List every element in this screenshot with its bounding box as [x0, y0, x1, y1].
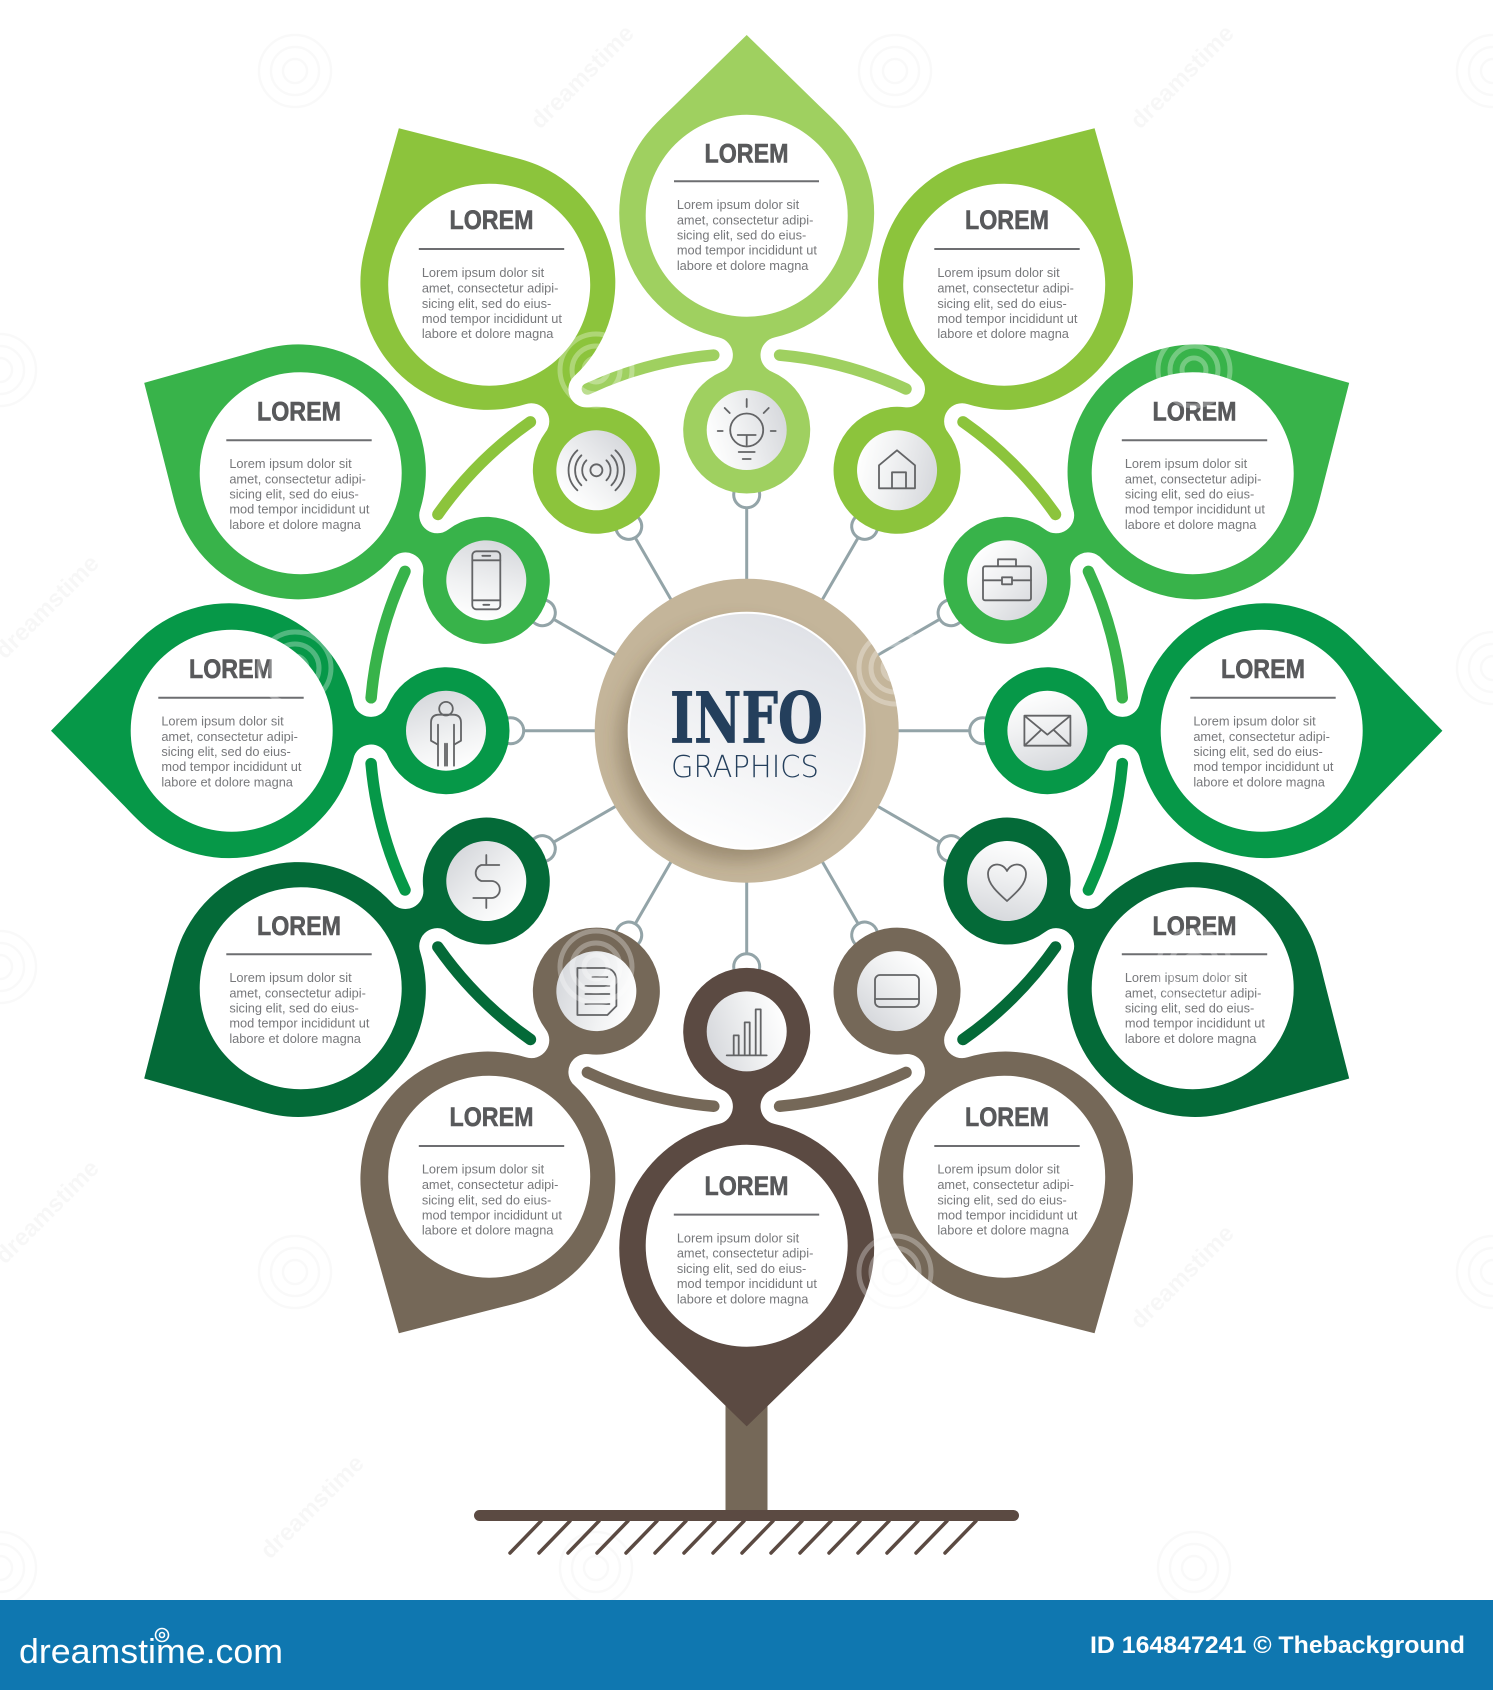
hub title INFO: INFO	[670, 677, 823, 760]
connector lines from hub to icons	[498, 482, 996, 980]
heading: LOREM	[1152, 397, 1236, 427]
body text: labore et dolore magna	[937, 326, 1070, 341]
body text: amet, consectetur adipi-	[1193, 729, 1330, 744]
body text: mod tempor incididunt ut	[422, 1207, 562, 1222]
body text: labore et dolore magna	[422, 1223, 554, 1238]
body text: amet, consectetur adipi-	[677, 212, 813, 227]
body text: labore et dolore magna	[229, 1031, 362, 1046]
body text: Lorem ipsum dolor sit	[677, 1230, 800, 1245]
footer banner	[0, 1600, 1493, 1690]
body text: Lorem ipsum dolor sit	[229, 970, 352, 985]
body text: amet, consectetur adipi-	[422, 1177, 558, 1192]
body text: mod tempor incididunt ut	[937, 311, 1078, 326]
body text: sicing elit, sed do eius-	[677, 228, 806, 243]
body text: amet, consectetur adipi-	[937, 280, 1074, 295]
heading: LOREM	[450, 1102, 534, 1132]
icon: person	[431, 702, 461, 766]
arc left of top leaf	[587, 355, 714, 389]
heading: LOREM	[704, 138, 788, 168]
body text: sicing elit, sed do eius-	[937, 1192, 1067, 1207]
body text: sicing elit, sed do eius-	[1125, 1001, 1254, 1016]
heading: LOREM	[189, 654, 273, 684]
leaf shape mid-lower right	[888, 739, 1413, 1189]
body text: amet, consectetur adipi-	[422, 280, 558, 295]
body text: sicing elit, sed do eius-	[1193, 744, 1323, 759]
text: dreamstime	[1125, 1220, 1240, 1334]
body text: sicing elit, sed do eius-	[422, 1192, 551, 1207]
leaf shape lower right	[755, 872, 1205, 1397]
body text: Lorem ipsum dolor sit	[937, 265, 1060, 280]
heading: LOREM	[450, 205, 534, 235]
body text: sicing elit, sed do eius-	[937, 296, 1067, 311]
body text: sicing elit, sed do eius-	[161, 744, 291, 759]
arc mid-upper right	[1059, 571, 1152, 698]
body text: amet, consectetur adipi-	[1125, 471, 1261, 486]
body text: amet, consectetur adipi-	[161, 729, 298, 744]
icon: bar chart	[727, 1009, 767, 1055]
leaf shape bottom	[619, 968, 874, 1426]
footer logo text: dreamstime.com	[19, 1633, 283, 1671]
arc mid-upper left	[342, 571, 434, 698]
icon: heart	[988, 865, 1026, 901]
body text: Lorem ipsum dolor sit	[422, 1162, 545, 1177]
body text: mod tempor incididunt ut	[1125, 1016, 1265, 1031]
icon: card	[875, 975, 919, 1007]
icon: dollar	[473, 855, 500, 908]
heading: LOREM	[257, 911, 341, 941]
body text: labore et dolore magna	[1193, 775, 1326, 790]
body text: sicing elit, sed do eius-	[229, 487, 359, 502]
leaf shape upper right	[755, 64, 1205, 589]
body text: labore et dolore magna	[1125, 1031, 1257, 1046]
body text: mod tempor incididunt ut	[229, 502, 370, 517]
ground hatching	[510, 1521, 976, 1553]
body text: labore et dolore magna	[1125, 517, 1257, 532]
ground line	[474, 1510, 1019, 1521]
leaf shape mid-upper left	[80, 272, 605, 722]
hub ring	[595, 579, 899, 883]
arc right	[1088, 764, 1122, 890]
panel: leaf upper right	[755, 64, 1205, 589]
body text: labore et dolore magna	[937, 1223, 1070, 1238]
body text: amet, consectetur adipi-	[229, 471, 366, 486]
body text: Lorem ipsum dolor sit	[229, 456, 352, 471]
hub subtitle GRAPHICS: GRAPHICS	[671, 750, 819, 785]
panel: leaf mid-lower left	[80, 739, 605, 1189]
hub disc	[629, 613, 865, 849]
heading: LOREM	[704, 1171, 788, 1201]
arc upper left	[421, 422, 547, 514]
icon: briefcase	[983, 559, 1031, 600]
icon: envelope	[1024, 716, 1070, 746]
panel: leaf top	[587, 35, 906, 494]
leaf shape mid-upper right	[888, 272, 1413, 722]
heading: LOREM	[257, 397, 341, 427]
panel: leaf mid-upper right	[888, 272, 1413, 722]
body text: labore et dolore magna	[422, 326, 554, 341]
body text: Lorem ipsum dolor sit	[677, 197, 800, 212]
body text: mod tempor incididunt ut	[1125, 502, 1265, 517]
heading: LOREM	[1221, 654, 1305, 684]
arc lower left	[587, 1043, 714, 1136]
icon: light bulb	[718, 399, 776, 459]
arc mid-lower right	[963, 930, 1056, 1056]
body text: Lorem ipsum dolor sit	[161, 714, 284, 729]
arc upper right	[946, 422, 1072, 514]
body text: sicing elit, sed do eius-	[229, 1001, 359, 1016]
body text: labore et dolore magna	[229, 517, 362, 532]
body text: sicing elit, sed do eius-	[1125, 487, 1254, 502]
body text: Lorem ipsum dolor sit	[422, 265, 545, 280]
leaf shape upper left	[288, 64, 738, 589]
text: dreamstime	[1125, 20, 1240, 134]
arc mid-lower left	[438, 930, 530, 1056]
body text: Lorem ipsum dolor sit	[1193, 714, 1316, 729]
leaf shape right	[984, 603, 1442, 858]
text: dreamstime	[525, 20, 640, 134]
footer credit: ID 164847241 © Thebackground	[1090, 1632, 1465, 1659]
icon: phone	[472, 551, 500, 609]
icon: logo spiral	[156, 1628, 168, 1642]
body text: mod tempor incididunt ut	[677, 243, 817, 258]
body text: mod tempor incididunt ut	[229, 1016, 370, 1031]
icon: home	[879, 450, 915, 488]
panel: leaf lower left	[288, 872, 738, 1397]
panel: leaf mid-lower right	[888, 739, 1413, 1189]
panel: central hub	[595, 579, 899, 883]
body text: amet, consectetur adipi-	[677, 1246, 813, 1261]
body text: Lorem ipsum dolor sit	[937, 1162, 1060, 1177]
panel: leaf mid-upper left	[80, 272, 605, 722]
body text: mod tempor incididunt ut	[937, 1207, 1078, 1222]
icon: document	[577, 968, 616, 1015]
body text: sicing elit, sed do eius-	[677, 1261, 806, 1276]
leaf shape left	[51, 603, 510, 858]
arc right of top leaf	[780, 355, 906, 389]
tree trunk	[726, 1400, 768, 1512]
body text: amet, consectetur adipi-	[937, 1177, 1074, 1192]
body text: amet, consectetur adipi-	[229, 985, 366, 1000]
body text: mod tempor incididunt ut	[422, 311, 562, 326]
body text: amet, consectetur adipi-	[1125, 985, 1261, 1000]
icon: signal	[569, 450, 624, 490]
leaf shape top	[619, 35, 874, 494]
panel: leaf bottom	[619, 968, 874, 1426]
arc left	[371, 764, 405, 890]
arc lower right	[780, 1043, 906, 1136]
heading: LOREM	[965, 205, 1049, 235]
body text: labore et dolore magna	[161, 775, 294, 790]
leaf shape lower left	[288, 872, 738, 1397]
panel: leaf right	[984, 603, 1442, 890]
body text: labore et dolore magna	[677, 1291, 809, 1306]
body text: labore et dolore magna	[677, 258, 809, 273]
body text: Lorem ipsum dolor sit	[1125, 970, 1248, 985]
leaf shape mid-lower left	[80, 739, 605, 1189]
panel: leaf lower right	[755, 872, 1205, 1397]
text: dreamstime	[255, 1450, 370, 1564]
heading: LOREM	[1152, 911, 1236, 941]
heading: LOREM	[965, 1102, 1049, 1132]
panel: leaf left	[51, 603, 510, 890]
body text: mod tempor incididunt ut	[161, 759, 302, 774]
body text: mod tempor incididunt ut	[1193, 759, 1334, 774]
body text: mod tempor incididunt ut	[677, 1276, 817, 1291]
panel: leaf upper left	[288, 64, 738, 589]
body text: Lorem ipsum dolor sit	[1125, 456, 1248, 471]
body text: sicing elit, sed do eius-	[422, 296, 551, 311]
